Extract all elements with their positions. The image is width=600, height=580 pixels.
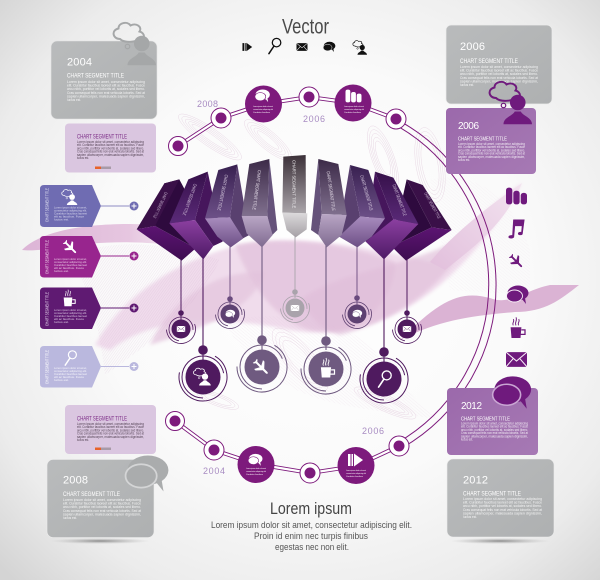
tab: plane: elit ac faucibus. Fusce — [54, 266, 84, 270]
panel: 2006 purple: 2006 — [458, 121, 479, 132]
panel: 2006 purple — [446, 108, 536, 174]
tab: cloud person: consectetur adipiscing elit. — [54, 208, 87, 212]
timeline badge: chat bottom: Lorem ipsum dolor sit amet — [246, 467, 266, 470]
block 4 — [242, 159, 277, 247]
panel: lavender top: CHART SEGMENT TITLE — [77, 134, 127, 140]
panel: 2004: Lorem ipsum dolor sit amet, consectetur adipiscing — [67, 80, 145, 84]
block 6: CHART SEGMENT TITLE — [326, 171, 336, 211]
pendant: mail far right — [388, 258, 426, 348]
panel: lavender top: sapien ullamcorper, malesuada sapien dignissim, — [77, 153, 144, 157]
tab: cup: Lorem ipsum dolor sit amet, — [54, 308, 87, 312]
year labels: 2004 — [203, 466, 225, 476]
panel: 2012 purple: arcu nibh, porttitor vel lobortis at, sodales sed libero. — [461, 428, 528, 432]
timeline badge: play bottom: Curabitur faucibus — [346, 475, 363, 478]
tab: plane: consectetur adipiscing elit. — [54, 260, 87, 264]
block 5: CHART SEGMENT TITLE — [291, 160, 296, 208]
panel: 2006 gray: elit. Curabitur faucibus laoreet elit ac faucibus. Fusce — [460, 69, 538, 73]
tab: cup: CHART SEGMENT TITLE — [44, 292, 50, 326]
panel: 2012 purple: elit. Curabitur faucibus laoreet elit ac faucibus. Fusce — [461, 425, 528, 429]
panel: 2012 gray: luctus est. — [463, 515, 477, 519]
tab: magnifier: CHART SEGMENT TITLE — [44, 350, 50, 384]
pendant: mail far left — [162, 258, 200, 348]
panel: 2012 gray: Lorem ipsum dolor sit amet, consectetur adipiscing — [463, 497, 542, 501]
block 5 — [282, 155, 307, 237]
panel: 2008 gray: 2008 — [63, 474, 88, 486]
panel: 2006 gray: luctus est. — [460, 83, 474, 87]
tab: cup: consectetur adipiscing elit. — [54, 311, 87, 315]
tab: cup: luctus est. — [54, 320, 69, 324]
tab: magnifier: elit ac faucibus. Fusce — [54, 375, 84, 379]
timeline nodes — [166, 87, 409, 483]
panel: lavender top: luctus est. — [77, 156, 89, 160]
pendant: plane large — [228, 245, 296, 401]
panel: 2006 gray: sapien ullamcorper, malesuada sapien dignissim, — [460, 79, 538, 83]
panel: 2006 gray: Cras consequat felis non erat vehicula lobortis. Sed at — [460, 76, 538, 80]
panel: 2004: arcu nibh, porttitor vel lobortis at, sodales sed libero. — [67, 87, 145, 91]
panel: 2008 gray: luctus est. — [63, 516, 77, 520]
tab: magnifier: luctus est. — [54, 378, 69, 382]
panel: 2006 purple: sapien ullamcorper, malesuada sapien dignissim, — [458, 155, 525, 159]
icon: chat 2012 — [493, 376, 531, 409]
panel: lavender bottom: luctus est. — [77, 438, 89, 442]
panel: 2012 gray: 2012 — [463, 474, 488, 486]
panel: lavender top — [65, 124, 156, 172]
panel: 2006 gray: Lorem ipsum dolor sit amet, consectetur adipiscing — [460, 65, 538, 69]
block 3 — [205, 164, 249, 247]
block 9: CHART SEGMENT TITLE — [423, 191, 442, 220]
block 8: CHART SEGMENT TITLE — [391, 184, 407, 217]
tab: magnifier: Curabitur faucibus laoreet — [54, 372, 87, 376]
panel: 2006 gray — [446, 25, 552, 104]
timeline badge: bars top: Curabitur faucibus — [344, 111, 361, 114]
panel: 2006 purple: arcu nibh, porttitor vel lobortis at, sodales sed libero. — [458, 148, 525, 152]
year labels: 2006 — [303, 114, 325, 124]
timeline badge: play bottom — [338, 447, 374, 484]
panel: 2006 purple: luctus est. — [458, 158, 470, 162]
block 7: CHART SEGMENT TITLE — [359, 175, 374, 211]
timeline ring — [175, 97, 496, 473]
tab: plane: Lorem ipsum dolor sit amet, — [54, 257, 87, 261]
pendant: cup large — [292, 245, 360, 403]
timeline badge: chat top: Curabitur faucibus — [253, 111, 270, 114]
year labels: 2008 — [197, 99, 218, 109]
panel: lavender bottom — [65, 405, 156, 454]
footer text: Lorem ipsum dolor sit amet, consectetur adipiscing elit. — [211, 520, 412, 531]
tab: cloud person: Lorem ipsum dolor sit amet, — [54, 206, 87, 210]
panel: 2012 purple: CHART SEGMENT TITLE — [461, 416, 510, 422]
panel: 2006 gray: CHART SEGMENT TITLE — [460, 58, 519, 65]
footer text — [211, 520, 412, 553]
timeline badge: chat bottom — [238, 446, 274, 483]
panel: 2012 gray: sapien ullamcorper, malesuada sapien dignissim, — [463, 511, 542, 515]
title: Vector — [282, 16, 329, 38]
timeline badge: chat top: Lorem ipsum dolor sit amet — [253, 105, 273, 108]
block 1: CHART SEGMENT TITLE — [152, 191, 169, 219]
panel: 2008 gray: Cras consequat felis non erat vehicula lobortis. Sed at — [63, 509, 141, 513]
tab: plane: Curabitur faucibus laoreet — [54, 263, 87, 267]
panel: 2004: luctus est. — [67, 98, 81, 102]
pendant: mail center — [276, 235, 314, 327]
panel: 2012 purple: Lorem ipsum dolor sit amet, consectetur adipiscing — [461, 422, 528, 426]
tab: cup — [40, 288, 138, 329]
panel: 2012 purple: Cras consequat felis non erat vehicula lobortis. Sed at — [461, 431, 528, 435]
panel: 2012 purple — [447, 388, 538, 455]
timeline badge: chat top: consectetur adipiscing elit — [253, 108, 273, 111]
panel: 2004: elit. Curabitur faucibus laoreet elit ac faucibus. Fusce — [67, 84, 145, 88]
pendant: magnifier large — [351, 255, 417, 412]
timeline badge: chat bottom: Curabitur faucibus — [246, 473, 263, 476]
tab: plane: luctus est. — [54, 269, 69, 273]
tab: cloud person: CHART SEGMENT TITLE — [44, 188, 50, 222]
panel: 2008 gray: CHART SEGMENT TITLE — [63, 491, 120, 498]
block 2 — [169, 172, 223, 259]
decorative ribbon waves — [22, 178, 579, 420]
block 6 — [311, 159, 347, 247]
footer heading: Lorem ipsum — [270, 499, 352, 518]
panel: 2012 purple: sapien ullamcorper, malesuada sapien dignissim, — [461, 434, 528, 438]
block 1 — [137, 179, 196, 261]
timeline badge: chat top — [245, 86, 282, 122]
panel: lavender top: arcu nibh, porttitor vel lobortis at, sodales sed libero. — [77, 146, 144, 150]
icon row — [242, 38, 367, 55]
panel: 2008 gray: Lorem ipsum dolor sit amet, consectetur adipiscing — [63, 498, 141, 502]
icon column right — [506, 188, 528, 367]
tab: magnifier: consectetur adipiscing elit. — [54, 369, 87, 373]
timeline badge: bars top: consectetur adipiscing elit — [344, 108, 364, 111]
panel: 2012 gray: elit. Curabitur faucibus laoreet elit ac faucibus. Fusce — [463, 501, 542, 505]
panel: 2004 — [51, 23, 157, 119]
panel: 2012 purple: luctus est. — [461, 438, 473, 442]
3D block fan — [137, 155, 452, 261]
pendant: chat left — [211, 245, 249, 333]
panel: 2006 purple: CHART SEGMENT TITLE — [458, 136, 507, 142]
tab: plane — [40, 236, 138, 278]
icon: cloud person 2006 — [490, 82, 532, 124]
panel: lavender bottom: Lorem ipsum dolor sit amet, consectetur adipiscing — [77, 422, 144, 426]
panel: 2012 gray — [447, 459, 554, 544]
tab: plane: CHART SEGMENT TITLE — [44, 240, 50, 274]
block 3: CHART SEGMENT TITLE — [216, 174, 229, 211]
block 9 — [392, 179, 452, 261]
tab: cup: elit ac faucibus. Fusce — [54, 317, 84, 321]
tab: cloud person: luctus est. — [54, 218, 69, 222]
panel: 2012 gray: arcu nibh, porttitor vel lobortis at, sodales sed libero. — [463, 504, 542, 508]
panel: 2006 gray: arcu nibh, porttitor vel lobortis at, sodales sed libero. — [460, 72, 538, 76]
panel: 2004: Cras consequat felis non erat vehicula lobortis. Sed at — [67, 91, 145, 95]
panel: lavender bottom: elit. Curabitur faucibus laoreet elit ac faucibus. Fusce — [77, 425, 144, 429]
pendant: cloud person large — [170, 255, 236, 410]
panel: lavender bottom: Cras consequat felis non erat vehicula lobortis. Sed at — [77, 432, 144, 436]
tab: cloud person — [40, 185, 138, 227]
panel: 2008 gray: elit. Curabitur faucibus laoreet elit ac faucibus. Fusce — [63, 502, 141, 506]
panel: lavender bottom: sapien ullamcorper, malesuada sapien dignissim, — [77, 435, 144, 439]
panel: lavender top: Lorem ipsum dolor sit amet, consectetur adipiscing — [77, 140, 144, 144]
footer text: egestas nec non elit. — [275, 542, 349, 553]
tab: magnifier: Lorem ipsum dolor sit amet, — [54, 366, 87, 370]
block 2: CHART SEGMENT TITLE — [182, 183, 198, 216]
tab: magnifier — [40, 346, 138, 388]
tab: cloud person: Curabitur faucibus laoreet — [54, 212, 87, 216]
panel: 2008 gray — [47, 455, 168, 544]
year labels — [197, 99, 384, 476]
panel: 2004: 2004 — [67, 56, 92, 68]
block 4: CHART SEGMENT TITLE — [251, 170, 262, 210]
panel: 2008 gray: sapien ullamcorper, malesuada sapien dignissim, — [63, 512, 141, 516]
block 8 — [366, 172, 418, 259]
panel: lavender bottom: arcu nibh, porttitor vel lobortis at, sodales sed libero. — [77, 428, 144, 432]
timeline badge: play bottom: consectetur adipiscing elit — [346, 472, 366, 475]
panel: 2012 purple: 2012 — [461, 401, 482, 412]
footer text: Proin id enim nec turpis finibus — [254, 531, 368, 542]
timeline badge: play bottom: Lorem ipsum dolor sit amet — [346, 469, 366, 472]
timeline badge: bars top: Lorem ipsum dolor sit amet — [344, 105, 364, 108]
timeline badge: bars top — [334, 84, 372, 122]
timeline badge: chat bottom: consectetur adipiscing elit — [246, 470, 266, 473]
year labels: 2006 — [362, 426, 384, 436]
panel: lavender top: Cras consequat felis non erat vehicula lobortis. Sed at — [77, 150, 144, 154]
panel: 2008 gray: arcu nibh, porttitor vel lobortis at, sodales sed libero. — [63, 505, 141, 509]
tab: cloud person: elit ac faucibus. Fusce — [54, 214, 84, 218]
panel: lavender bottom: CHART SEGMENT TITLE — [77, 416, 127, 422]
panel: 2006 purple: elit. Curabitur faucibus laoreet elit ac faucibus. Fusce — [458, 145, 525, 149]
panel: 2004: CHART SEGMENT TITLE — [67, 72, 124, 80]
block 7 — [338, 165, 385, 247]
panel: 2012 gray: CHART SEGMENT TITLE — [463, 490, 522, 498]
panel: 2006 purple: Cras consequat felis non erat vehicula lobortis. Sed at — [458, 152, 525, 156]
decorative line loops — [174, 108, 450, 425]
panel: 2012 gray: Cras consequat felis non erat vehicula lobortis. Sed at — [463, 508, 542, 512]
panel: 2004: sapien ullamcorper, malesuada sapien dignissim, — [67, 94, 145, 98]
panel: 2006 gray: 2006 — [460, 41, 485, 53]
pendant: chat right — [338, 245, 376, 333]
panel: 2006 purple: Lorem ipsum dolor sit amet, consectetur adipiscing — [458, 142, 525, 146]
panel: lavender top: elit. Curabitur faucibus laoreet elit ac faucibus. Fusce — [77, 143, 144, 147]
tab: cup: Curabitur faucibus laoreet — [54, 314, 87, 318]
